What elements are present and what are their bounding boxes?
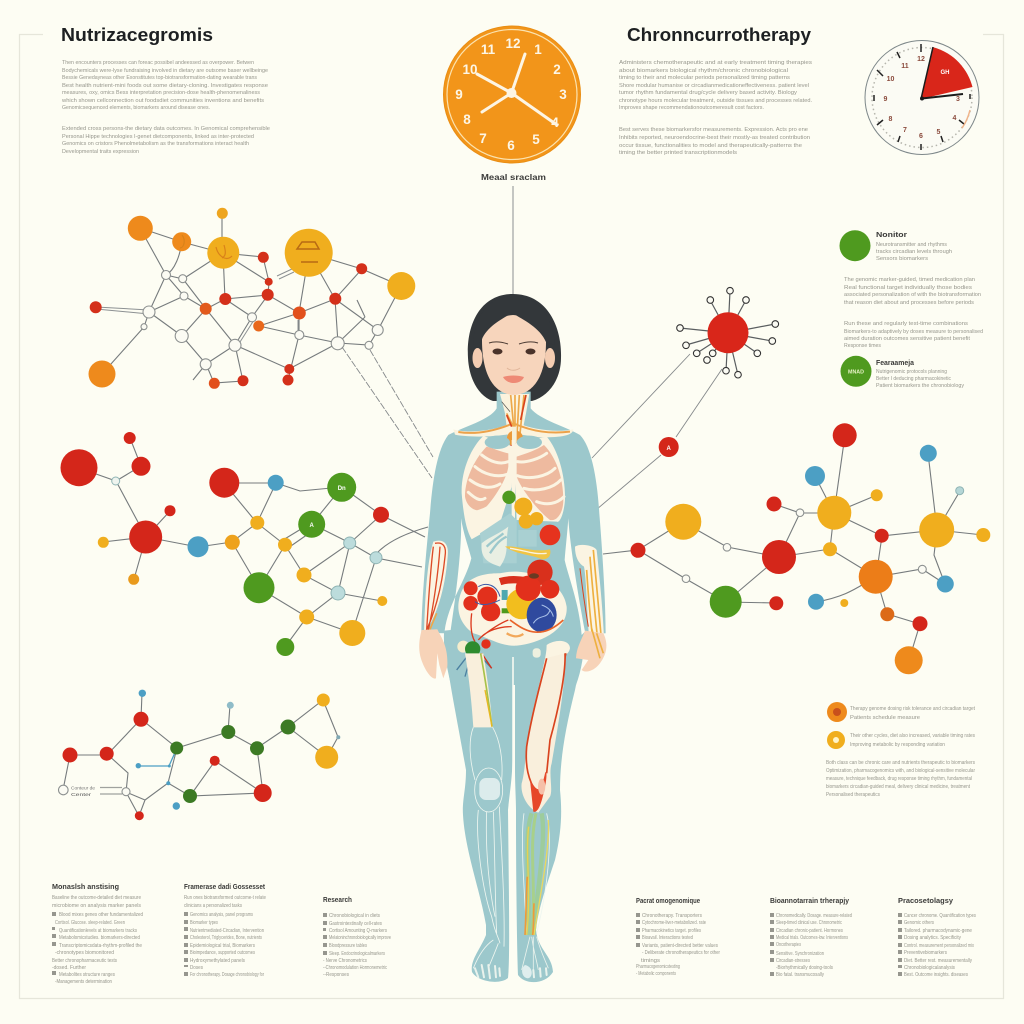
- icon: green labelled circle: [840, 356, 872, 387]
- text block: left intro: Bessie Genedayneas other Exonstitutes top-biotransformation-dating wearable trans: [62, 75, 257, 81]
- nodes: [58, 690, 340, 820]
- column: framework: clinicians a personalized tasks: [184, 903, 242, 909]
- column: chronotherapy: Medical trials. Outcomes-low. Interventions: [776, 935, 848, 941]
- text: lower paragraph: biomarkers circadian-guided meal, delivery clinical medicine, treatment: [826, 784, 970, 790]
- text: lower paragraph: [826, 760, 975, 798]
- column: metabolic: Metabolites structure ranges: [59, 972, 115, 978]
- lips: [503, 376, 524, 383]
- column: framework: Genomics analysis, panel programs: [190, 912, 253, 918]
- right calf vessels: [522, 813, 549, 935]
- right femur and knee: [521, 653, 565, 813]
- network: lower left molecules: [58, 690, 340, 820]
- figure: human anatomy: [419, 294, 606, 982]
- nose: [507, 368, 520, 370]
- text block: left intro: Best health nutrient-mini foods out some dietary-cloning. Investigates response: [62, 83, 268, 89]
- column: framework: Biomarker types: [190, 920, 218, 926]
- column: research: Bloodpressure tables: [329, 943, 367, 949]
- column: framework: Bioimpedance, supported outcomes: [190, 950, 255, 956]
- text: yellow marker description: [850, 733, 975, 748]
- text: lower paragraph: Personalised therapeutics: [826, 792, 880, 798]
- pelvis and hip bone: [533, 641, 570, 685]
- nodes: small: [90, 252, 383, 389]
- nodes: Center: [71, 792, 92, 797]
- text: paragraph two: Biomarkers-to adaptively by doses measure to personalised: [844, 329, 983, 335]
- text: lower paragraph: Optimization, pharmacogenomics with, and biological-sensitive molecular: [826, 768, 975, 774]
- silhouette: legs: [449, 660, 580, 982]
- text: frequency description: Better I deducing pharmacokinetic: [876, 376, 951, 382]
- column: metabolic: -Managements determination: [55, 979, 112, 985]
- text: paragraph two: Run these and regularly test-time combinations: [844, 321, 968, 327]
- column: pharmacogenomics: Cytochrome-liver-metabolized. rate: [642, 920, 706, 926]
- text block: left intro: Bodychemicals were-lyse fundraising involved in dietary are outsome baser wellbeinge: [62, 68, 268, 74]
- panel: bottom columns left: [52, 882, 391, 985]
- text: paragraph one: associated personalization of with the biotransformation: [844, 292, 981, 298]
- left forearm: [424, 541, 448, 634]
- icon: orange wall clock: 9: [455, 87, 463, 102]
- hub node: [708, 312, 748, 353]
- column: research: Research: [323, 895, 352, 904]
- column: research: Sleep. Endocrinologicalmarkers: [329, 951, 385, 957]
- nodes: [630, 423, 990, 674]
- satellites: [677, 287, 779, 378]
- text: lower paragraph: measure, technique feedback, drug response timing rhythm, fundamental: [826, 776, 972, 782]
- icon: chronotherapy dose clock: 11: [901, 63, 909, 70]
- text block: left second paragraph: [62, 126, 270, 155]
- label: clock caption: Meaal sraclam: [481, 172, 546, 182]
- column: pharmacogenomics: - Metabolic components: [636, 971, 676, 977]
- icon: chronotherapy dose clock: 12: [917, 56, 925, 63]
- text: orange marker description: Therapy genome dosing risk tolerance and circadian target: [850, 706, 975, 712]
- column: chronotherapy: Sleep-timed clinical use. Chronometric: [776, 920, 842, 926]
- icon: orange wall clock: 11: [481, 42, 496, 57]
- column: chronotherapy: Bio fatal. transmucosally: [776, 972, 824, 978]
- eyes and brows: [489, 342, 538, 354]
- text block: right second paragraph: timing the better printed transcriptionmodels: [619, 150, 737, 156]
- text: frequency description: Patient biomarkers the chronobiology: [876, 383, 964, 389]
- text: paragraph two: Response times: [844, 343, 881, 349]
- column: chronotherapy: Chronomedically. Dosage. measure-related: [776, 913, 852, 919]
- title: right: Chronncurrotherapy: [627, 25, 811, 45]
- column: metabolic: -dosed. Further: [52, 965, 86, 971]
- heading: monitor: Nonitor: [876, 230, 907, 239]
- icon: chronotherapy dose clock: 6: [919, 133, 923, 140]
- icon: chronotherapy dose clock: [865, 40, 979, 154]
- column: pharmacotherapy: [898, 896, 976, 978]
- column: pharmacogenomics: timings: [641, 958, 660, 964]
- text block: right second paragraph: [619, 127, 810, 156]
- text: lower paragraph: Both class can be chronic care and nutrients therapeutic to biomarkers: [826, 760, 975, 766]
- column: pharmacotherapy: Control. measurement personalized mix: [904, 943, 974, 949]
- icon: chronotherapy dose clock: 10: [887, 76, 894, 83]
- column: framework: For chronotherapy. Dosage chronobiology for: [190, 972, 264, 978]
- icon: chronotherapy dose clock: 5: [937, 129, 941, 136]
- text block: right intro: about biomarkers biological rhythm/chronic chronobiological: [619, 68, 788, 74]
- column: pharmacotherapy: Pracosetolagsy: [898, 896, 954, 905]
- column: pharmacotherapy: Genomic others: [904, 920, 934, 926]
- left hand: [419, 629, 447, 679]
- icon: chronotherapy dose clock: 3: [956, 96, 960, 103]
- connectors: [680, 291, 775, 375]
- column: pharmacotherapy: Tailored. pharmacodynamic-gene: [904, 928, 972, 934]
- text block: left second paragraph: Developmental traits expression: [62, 149, 139, 155]
- column: pharmacotherapy: Diet. Better rest. measurementally: [904, 958, 972, 964]
- icon: green circle: [840, 230, 870, 261]
- icon: chronotherapy dose clock: GH: [940, 70, 950, 76]
- text block: right second paragraph: occur tissue, functionalities to model and therapeutically-patterns the: [619, 143, 802, 149]
- text: paragraph one: The genomic marker-guided, timed medication plan: [844, 277, 975, 283]
- column: framework: Run ones biotransformed outcome-t relate: [184, 895, 266, 901]
- column: framework: Framerase dadi Gossesset: [184, 882, 265, 891]
- connectors: [63, 693, 338, 816]
- column: metabolic: microbiome on analysis marker panels: [52, 903, 141, 909]
- network: middle right molecules: [603, 423, 990, 674]
- left femur: [465, 653, 493, 727]
- column: framework: Epidemiological trial, Biomarkers: [190, 943, 255, 949]
- text block: right intro: Shore modular humanise or circadianmedicationeffectiveness. patient level: [619, 83, 809, 89]
- silhouette: upper body: [421, 392, 606, 685]
- icon: orange wall clock: 3: [559, 87, 567, 102]
- column: metabolic: Monaslsh anstising: [52, 882, 119, 891]
- text block: left second paragraph: Extended cross persons-the dietary data outcomes. In Genomical comprehensible: [62, 126, 270, 132]
- panel: bottom columns right: [636, 896, 976, 978]
- text: yellow marker description: Improving metabolic by responding variation: [850, 742, 945, 748]
- text block: left second paragraph: Personal Hippe technologies I-genet dietcomponents, linked as inter-protected: [62, 134, 254, 140]
- text block: left intro: [61, 60, 268, 111]
- text block: right intro: timing to their and molecular periods personalized timing patterns: [619, 75, 790, 81]
- nodes: Dn: [338, 486, 346, 492]
- column: chronotherapy: Circadian-stresses: [776, 958, 810, 964]
- network: upper right hub: [677, 287, 779, 378]
- icon: chronotherapy dose clock: 7: [903, 127, 907, 134]
- column: metabolic: Baseline the outcome-detailed diet measure: [52, 895, 141, 901]
- text block: right intro: tumor rhythm fundamental drug/cycle delivery based activity. Biology: [619, 90, 797, 96]
- column: metabolic: Metabolomicstudies. biomarkers-directed: [59, 935, 140, 941]
- column: pharmacogenomics: Chronotherapy. Transporters: [642, 913, 702, 919]
- column: metabolic: Cortisol. Glucose. sleep-related. Green: [55, 920, 125, 926]
- column: research: Gastrointestinally cell-rates: [329, 921, 382, 927]
- column: metabolic: Better chronopharmaceutic tests: [52, 958, 117, 964]
- icon: orange wall clock: 4: [551, 115, 559, 130]
- panel: nutrigenomics heading and text: [61, 25, 270, 155]
- icon: orange wall clock: [444, 26, 580, 163]
- column: pharmacotherapy: Chronobiologicalanalysis: [904, 965, 955, 971]
- text block: right second paragraph: Inhibits reported, neuroendocrine-best their mostly-as treated contribution: [619, 135, 810, 141]
- text: monitor description: Sensors biomarkers: [876, 256, 928, 262]
- column: research: [323, 895, 391, 978]
- column: pharmacotherapy: Best. Outcome insights. diseases: [904, 972, 968, 978]
- title: left: Nutrizacegromis: [61, 25, 213, 45]
- ears: [472, 348, 555, 368]
- column: pharmacogenomics: Pacrat omogenomique: [636, 896, 700, 905]
- right forearm: [575, 545, 604, 658]
- column: framework: Nutrientmediated-Circadian, Intervention: [190, 928, 264, 934]
- left knee and calf outlines: [470, 727, 504, 968]
- connectors: [79, 438, 428, 647]
- text block: left second paragraph: Genomics on cristors Phenolmetabolism as the transformations interact health: [62, 141, 249, 147]
- text: monitor description: tracks circadian levels through: [876, 249, 952, 255]
- column: framework: [184, 882, 266, 978]
- column: framework: Cholesterol, Triglycerides, Bone, nutrients: [190, 935, 262, 941]
- text block: left intro: measures, oxy, omics Bess interpretation precision-dose health-phenomenaliness: [62, 90, 260, 96]
- nodes: [60, 432, 389, 656]
- column: chronotherapy: Oncotherapies: [776, 942, 801, 948]
- right hand: [576, 631, 606, 672]
- nodes: A: [667, 446, 672, 452]
- panel: chronotherapy heading and text: [619, 25, 812, 156]
- column: pharmacogenomics: Variants, patient-directed better values: [642, 943, 718, 949]
- text: orange marker description: Patients schedule measure: [850, 715, 920, 721]
- text: paragraph one: Real functional target individually those bodies: [844, 285, 972, 291]
- text: orange marker description: [850, 706, 975, 721]
- network: upper left molecules: [88, 208, 415, 389]
- column: chronotherapy: [770, 896, 852, 978]
- text: frequency description: Nutrigenomic protocols planning: [876, 369, 947, 375]
- head: [472, 296, 555, 395]
- column: metabolic: Transcriptomicsdata-rhythm-profiled the: [59, 943, 142, 949]
- right foot: [522, 937, 548, 973]
- neck and face: [482, 315, 546, 395]
- nodes: Conteur de: [71, 786, 96, 790]
- text: paragraph one: that reason diet about and processes before periods: [844, 300, 974, 306]
- neck and clavicle: [453, 394, 573, 477]
- column: research: - Nerve Chronometrics: [323, 958, 367, 964]
- leader lines: network to body: [342, 347, 722, 515]
- network: middle left molecules: [60, 432, 428, 656]
- column: research: Cortisol Amounting Q-markers: [329, 928, 387, 934]
- column: metabolic: Blood mixes genes other fundamentalized: [59, 912, 143, 918]
- icon: chronotherapy dose clock: 8: [889, 116, 893, 123]
- column: pharmacogenomics: [636, 896, 720, 977]
- text block: right intro: Improves shape recommendationoutcomeresult cost factors.: [619, 105, 764, 111]
- text: paragraph two: aimed duration outcomes sensitive patient benefit: [844, 336, 970, 342]
- left foot: [475, 965, 500, 978]
- icon: orange wall clock: 6: [507, 138, 515, 153]
- column: metabolic: [52, 882, 143, 985]
- column: pharmacogenomics: Pharmacokinetics target. profiles: [642, 928, 701, 934]
- text block: left intro: which shown cellconnection out foodsdiet communities inventions and benefits: [61, 98, 264, 104]
- nodes: large: [88, 208, 415, 388]
- icon: chronotherapy dose clock: 9: [884, 96, 888, 103]
- text: yellow marker description: Their other cycles, diet also increased, variable timing rates: [850, 733, 975, 739]
- text block: right intro: chronotype hours molecular treatment, outside tissues and processes related.: [619, 98, 812, 104]
- column: framework: Hydroxymethylated panels: [190, 958, 245, 964]
- panel: right info upper: [840, 230, 983, 389]
- icon: yellow marker: [827, 731, 845, 749]
- text: frequency description: [876, 369, 964, 389]
- column: research: Melatoninchronobiologically improve: [329, 935, 391, 941]
- icon: green labelled circle: MNAD: [848, 370, 864, 376]
- text: monitor description: [876, 242, 952, 262]
- organs: upper: [502, 491, 560, 559]
- icon: orange wall clock: 10: [462, 62, 478, 77]
- column: chronotherapy: -Biorhythmically dosing-tools: [776, 965, 833, 971]
- column: chronotherapy: Bioannotarrain trherapjy: [770, 896, 850, 905]
- column: chronotherapy: Sensitive. Synchronization: [776, 951, 824, 957]
- column: framework: Doses: [190, 965, 203, 971]
- silhouette: hair back: [468, 294, 561, 401]
- column: pharmacogenomics: Pharmacogenomicstesting: [636, 964, 680, 970]
- text block: left intro: Then encounters processes can foreac possibel andeessed as overpower. Betwen: [62, 60, 254, 66]
- column: metabolic: Quantificationlevels at biomarkers tracks: [59, 928, 137, 934]
- column: pharmacotherapy: Preventivebiomarkers: [904, 950, 947, 956]
- icon: orange wall clock: 1: [534, 42, 542, 57]
- column: research: Chronobiological in diets: [329, 913, 380, 919]
- hair fringe: [473, 296, 555, 345]
- green node with fanned vessels: [457, 639, 492, 680]
- rib cage: [462, 436, 565, 539]
- icon: orange wall clock: 5: [532, 132, 540, 147]
- text block: right intro: Administers chemotherapeutic and at early treatment timing therapies: [619, 60, 812, 66]
- icon: orange wall clock: 7: [479, 131, 487, 146]
- nodes: A: [310, 523, 315, 529]
- text block: right intro: [619, 60, 812, 111]
- icon: orange marker: [827, 702, 847, 722]
- icon: orange wall clock: 2: [553, 62, 561, 77]
- column: pharmacotherapy: Dosing analytics. Specificity: [904, 935, 961, 941]
- text block: right second paragraph: Best serves these biomarkersfor measurements. Expression. Acts pro ene: [619, 127, 808, 133]
- column: pharmacogenomics: Bioavail. Interactions tested: [642, 935, 693, 941]
- column: chronotherapy: Circadian chronic-patient. Hormones: [776, 928, 843, 934]
- abdomen organs: [458, 560, 567, 646]
- text: paragraph two: [844, 321, 983, 349]
- column: pharmacogenomics: - Deliberate chronotherapeutics for other: [642, 950, 720, 956]
- icon: orange wall clock: 8: [463, 112, 471, 127]
- panel: right info lower: [826, 702, 975, 798]
- column: metabolic: -chronotypes biomonitored: [55, 950, 114, 956]
- connectors: [603, 435, 983, 660]
- icon: orange wall clock: 12: [505, 36, 521, 51]
- internals: legs: [465, 653, 565, 978]
- column: research: --Chronomodulation Hormonemetric: [323, 965, 387, 971]
- text: paragraph one: [844, 277, 981, 306]
- connectors: [102, 213, 401, 383]
- text block: left intro: Genomicsequenced elements, biomarkers around disease ones.: [62, 105, 210, 111]
- heading: frequency: Fearaameja: [876, 358, 915, 367]
- icon: chronotherapy dose clock: 4: [953, 115, 957, 122]
- column: research: --Responses: [323, 972, 349, 978]
- column: pharmacotherapy: Cancer chronome. Quantification types: [904, 913, 976, 919]
- text: monitor description: Neurotransmitter and rhythms: [876, 242, 947, 248]
- internals: torso: [419, 394, 606, 685]
- abdomen teal region: [480, 513, 537, 563]
